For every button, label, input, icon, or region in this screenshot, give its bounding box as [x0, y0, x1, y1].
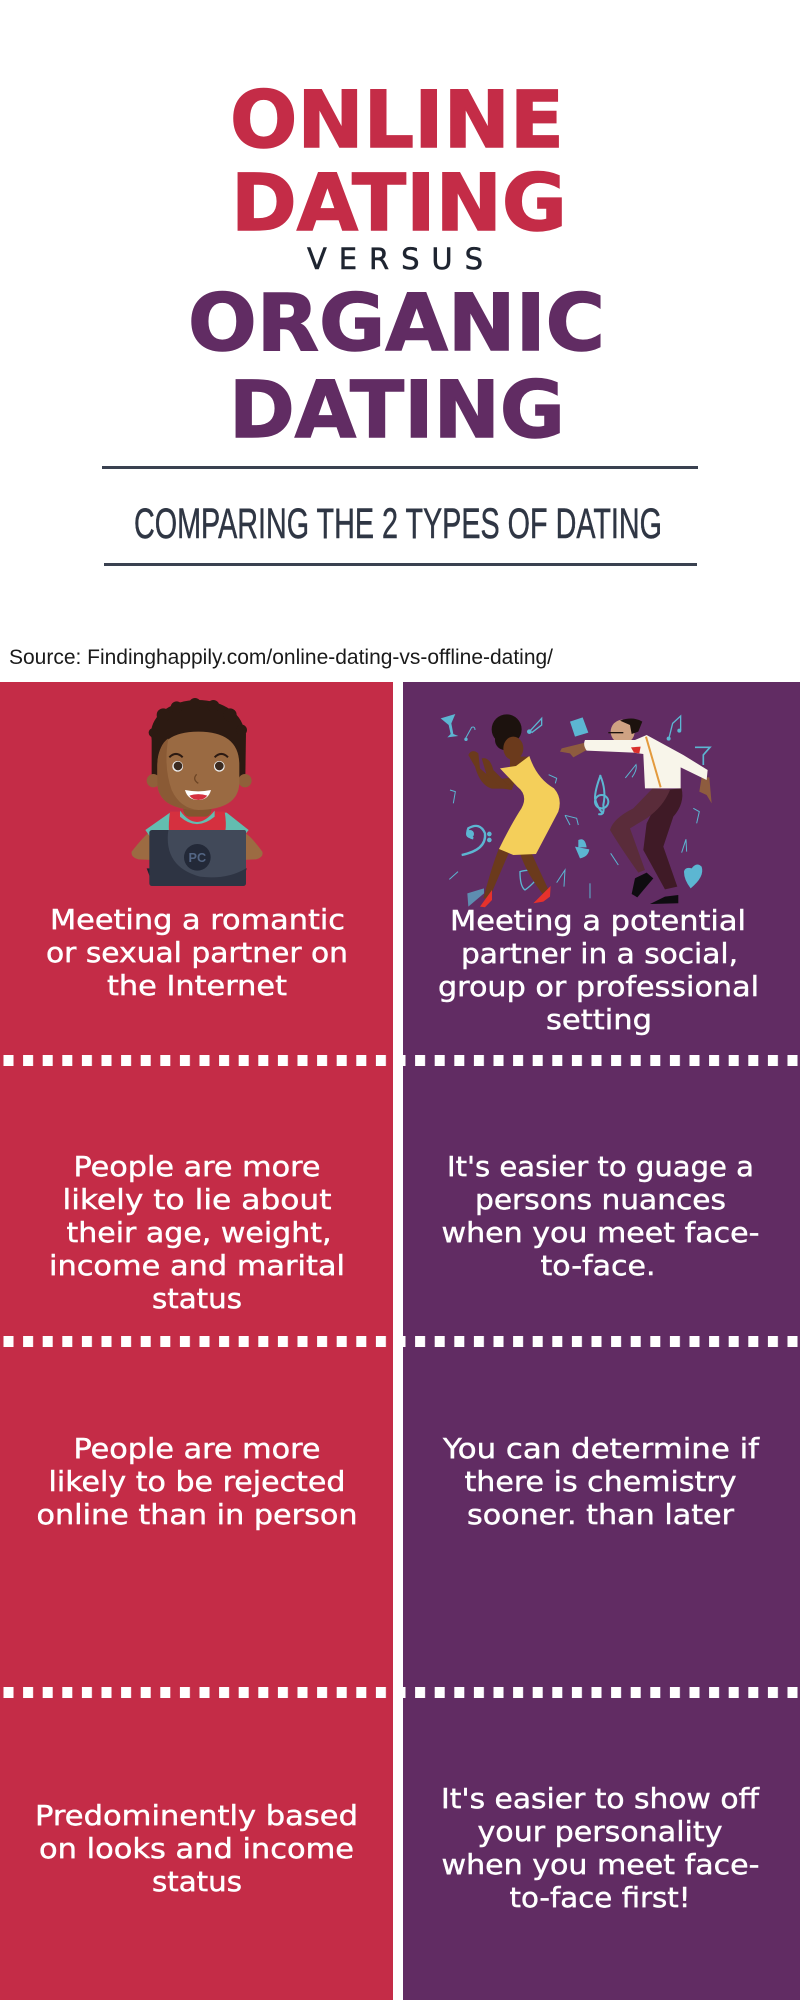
- text: row 4 right: your personality: [478, 1816, 722, 1848]
- woman: yellow dress: [499, 756, 560, 855]
- text: row 4 left: Predominently based: [35, 1800, 358, 1832]
- text: row 1 left: [46, 904, 348, 1002]
- icon: boy with laptop: [132, 698, 263, 886]
- text: row 4 right: [441, 1783, 760, 1914]
- text: row 2 left: their age, weight,: [66, 1217, 332, 1249]
- title: online dating: ONLINE: [230, 76, 564, 166]
- text: row 1 right: group or professional: [438, 971, 759, 1003]
- text: row 2 right: when you meet face-: [442, 1217, 760, 1249]
- text: row 2 left: People are more: [74, 1151, 320, 1183]
- text: row 2 right: persons nuances: [475, 1184, 726, 1216]
- woman: skin: [468, 737, 549, 898]
- text: row 3 left: People are more: [74, 1433, 320, 1465]
- text: row 2 left: income and marital: [49, 1250, 345, 1282]
- text: row 3 left: likely to be rejected: [48, 1466, 346, 1498]
- text: row 4 left: [35, 1800, 358, 1898]
- text: row 3 right: [442, 1433, 760, 1531]
- subtitle with rules: [102, 466, 698, 566]
- text: row 1 left: or sexual partner on: [46, 937, 348, 969]
- text: row 4 left: status: [152, 1866, 242, 1898]
- text: row 2 right: [442, 1151, 760, 1282]
- man: trousers: [643, 788, 682, 889]
- text: row 4 right: It's easier to show off: [441, 1783, 760, 1815]
- title: organic dating: DATING: [229, 366, 565, 456]
- man: hair and glasses: [620, 719, 642, 734]
- text: row 3 right: You can determine if: [442, 1433, 760, 1465]
- row dividers: [0, 1055, 800, 1698]
- icon: boy with laptop: PC: [189, 851, 206, 865]
- woman: heels: [480, 886, 551, 907]
- title: online dating: [230, 76, 567, 249]
- text: row 4 left: on looks and income: [39, 1833, 354, 1865]
- music notes and party icons: [441, 714, 710, 907]
- man: shoes: [632, 873, 678, 904]
- text: row 1 left: Meeting a romantic: [50, 904, 345, 936]
- man: skin: [560, 743, 712, 803]
- text: row 1 right: setting: [546, 1004, 652, 1036]
- text: row 2 left: likely to lie about: [62, 1184, 332, 1216]
- text: row 3 right: there is chemistry: [464, 1466, 736, 1498]
- versus label: VERSUS: [307, 242, 483, 276]
- text: row 4 right: when you meet face-: [442, 1849, 760, 1881]
- icon: dancing couple with music notes: [441, 714, 712, 907]
- title: organic dating: ORGANIC: [188, 279, 605, 369]
- woman: hair: [492, 714, 522, 750]
- title: online dating: DATING: [231, 159, 567, 249]
- text: row 2 left: [49, 1151, 345, 1315]
- panel: online dating column: [0, 682, 393, 2000]
- man: shirt: [584, 735, 708, 788]
- text: row 1 right: Meeting a potential: [450, 905, 746, 937]
- panel: organic dating column: [403, 682, 800, 2000]
- text: row 1 left: the Internet: [107, 970, 287, 1002]
- text: row 1 right: [438, 905, 759, 1036]
- text: row 2 left: status: [152, 1283, 242, 1315]
- text: row 2 right: to-face.: [540, 1250, 656, 1282]
- text: row 3 left: online than in person: [36, 1499, 358, 1531]
- source line: Source: Findinghappily.com/online-dating-vs-offline-dating/: [9, 646, 553, 669]
- text: row 2 right: It's easier to guage a: [447, 1151, 754, 1183]
- text: row 4 right: to-face first!: [510, 1882, 690, 1914]
- text: row 3 left: [36, 1433, 358, 1531]
- text: row 3 right: sooner. than later: [467, 1499, 735, 1531]
- title: organic dating: [188, 279, 605, 456]
- text: row 1 right: partner in a social,: [461, 938, 738, 970]
